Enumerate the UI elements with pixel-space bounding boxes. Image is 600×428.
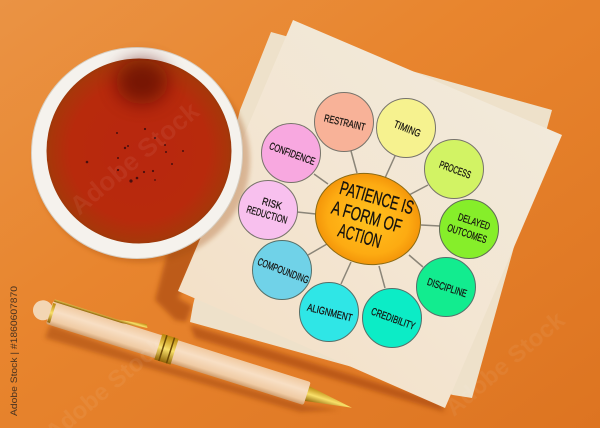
teacup <box>32 48 242 258</box>
node: restraint: RESTRAINT <box>323 113 367 134</box>
node: credibility <box>362 288 422 348</box>
tea surface <box>46 58 232 244</box>
node: delayed outcomes: DELAYED <box>456 211 492 233</box>
pen tip <box>303 385 354 415</box>
watermark: Adobe Stock <box>440 306 571 422</box>
napkin stack <box>178 20 562 408</box>
node: timing: TIMING <box>392 118 422 140</box>
central node: patience is a form of action: PATIENCE IS <box>337 178 416 219</box>
connectors <box>297 151 440 288</box>
pen upper barrel <box>46 301 166 359</box>
pen end cap <box>30 298 55 323</box>
node: delayed outcomes <box>440 200 498 258</box>
shadow: napkin and cup on table <box>155 235 445 412</box>
central node: patience is a form of action: ACTION <box>335 221 384 253</box>
pen band <box>154 334 179 365</box>
cup rim <box>32 48 242 258</box>
node: credibility: CREDIBILITY <box>369 306 417 333</box>
diagram <box>238 92 498 348</box>
napkin: top sheet <box>178 20 562 408</box>
watermark <box>40 95 571 428</box>
napkin: back sheets <box>190 32 552 398</box>
node: process <box>424 140 484 198</box>
cup shadow <box>34 57 250 263</box>
pen cap ring <box>47 303 56 323</box>
node: delayed outcomes: OUTCOMES <box>446 222 488 246</box>
pen clip <box>54 296 149 331</box>
node: confidence: CONFIDENCE <box>267 140 317 168</box>
node: compounding: COMPOUNDING <box>256 256 310 286</box>
node: confidence <box>262 124 320 182</box>
watermark: Adobe Stock <box>64 95 205 221</box>
node: risk reduction <box>238 180 298 240</box>
node: discipline: DISCIPLINE <box>426 276 468 300</box>
node: timing <box>376 98 436 158</box>
node: risk reduction: REDUCTION <box>245 204 289 227</box>
node: alignment <box>300 282 358 342</box>
node: discipline <box>416 258 476 316</box>
node: compounding <box>252 240 312 300</box>
tea leaf specks <box>86 128 184 183</box>
node: restraint <box>314 92 374 152</box>
central node: patience is a form of action <box>305 162 431 276</box>
node: alignment: ALIGNMENT <box>306 302 354 325</box>
tea dark reflection <box>116 60 168 104</box>
central node: patience is a form of action: A FORM OF <box>329 198 404 238</box>
node: process: PROCESS <box>437 159 473 181</box>
node: risk reduction: RISK <box>261 196 283 213</box>
credit: adobe stock id: Adobe Stock | #1860607870 <box>9 286 20 416</box>
pen shadow <box>45 325 340 412</box>
pen <box>29 290 357 421</box>
pen lower barrel <box>168 339 311 405</box>
